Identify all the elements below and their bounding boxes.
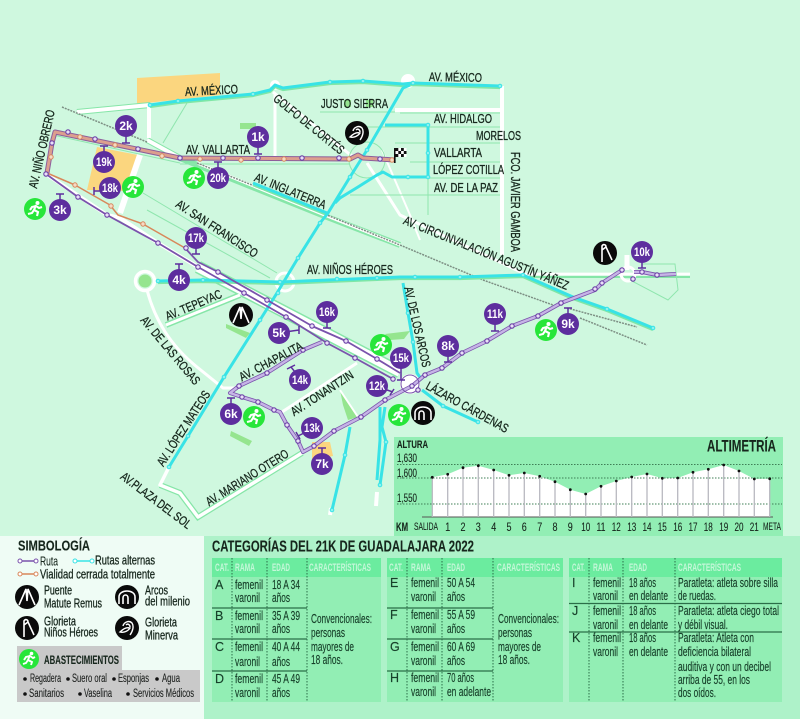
altimetry labels bbox=[397, 436, 776, 505]
table: categories A to D: años bbox=[272, 655, 290, 669]
icon: Glorieta Minerva bbox=[345, 121, 369, 145]
table: categories I to K: de ruedas. bbox=[678, 589, 716, 603]
table: categories E to H: 18 años. bbox=[498, 653, 530, 667]
marker 6k: 6k bbox=[224, 407, 238, 421]
kilometre axis: 18 bbox=[704, 520, 713, 534]
table: categories I to K: deficiencia bilateral bbox=[678, 645, 751, 659]
street labels: LÁZARO CÁRDENAS bbox=[424, 378, 511, 436]
table: categories I to K: y débil visual. bbox=[678, 618, 728, 632]
marker 14k bbox=[287, 365, 311, 391]
kilometre axis: 4 bbox=[491, 520, 496, 534]
table: categories A to D: Convencionales: bbox=[311, 612, 372, 626]
table: categories I to K: K bbox=[572, 631, 581, 645]
kilometre axis: 2 bbox=[460, 520, 466, 534]
marker 5k: 5k bbox=[272, 326, 286, 340]
table: categories E to H: femenil bbox=[411, 608, 439, 622]
legend: supplies: Regadera bbox=[30, 673, 61, 685]
table: categories A to D: varonil bbox=[235, 686, 260, 700]
table: categories E to H: 50 A 54 bbox=[447, 576, 475, 590]
table: categories E to H bbox=[387, 558, 563, 702]
table: categories A to D bbox=[212, 558, 381, 702]
main route bbox=[46, 132, 676, 452]
altimetry labels: 1,600 bbox=[397, 466, 417, 480]
table: categories A to D: 18 A 34 bbox=[272, 578, 300, 592]
kilometre axis: 7 bbox=[537, 520, 542, 534]
table: categories A to D: A bbox=[215, 578, 224, 592]
table: categories E to H: EDAD bbox=[447, 562, 465, 574]
route nodes: purple bbox=[44, 130, 659, 448]
orange blocks bbox=[87, 73, 333, 460]
marker 8k: 8k bbox=[441, 339, 455, 353]
table: categories E to H: 55 A 59 bbox=[447, 608, 475, 622]
marker 10k bbox=[631, 241, 653, 268]
legend route keys: Vialidad cerrada totalmente bbox=[40, 566, 155, 582]
kilometre axis: 15 bbox=[658, 520, 667, 534]
street labels: VALLARTA bbox=[434, 146, 483, 160]
marker 1k bbox=[247, 126, 269, 154]
table: categories A to D: femenil bbox=[235, 609, 263, 623]
icon: runner bbox=[370, 334, 392, 356]
thin green streets bbox=[53, 103, 678, 300]
white roads bbox=[46, 75, 690, 517]
table: categories I to K: en delante bbox=[629, 589, 668, 603]
green parks bbox=[138, 100, 410, 446]
street labels: AV. NIÑO OBRERO bbox=[26, 108, 58, 190]
street labels: AV. MÉXICO bbox=[185, 81, 238, 99]
alternate routes shadow bbox=[150, 83, 653, 330]
table: categories E to H: femenil bbox=[411, 640, 439, 654]
marker 16k: 16k bbox=[319, 305, 335, 319]
legend: Glorieta Niños Héroes bbox=[15, 614, 98, 640]
street labels bbox=[26, 69, 571, 532]
alternate routes bbox=[150, 81, 653, 510]
table: categories I to K: 18 años bbox=[629, 576, 656, 590]
kilometre axis: 13 bbox=[627, 520, 636, 534]
legend: supplies: Suero oral bbox=[72, 673, 107, 685]
legend: Arcos del milenio: del milenio bbox=[145, 594, 190, 608]
kilometre axis: KM bbox=[396, 520, 408, 534]
marker 17k bbox=[185, 227, 207, 254]
marker 15k bbox=[390, 347, 412, 380]
legend title: SIMBOLOGÍA bbox=[18, 538, 90, 554]
altitude profile chart bbox=[397, 464, 782, 517]
street labels: AV. HIDALGO bbox=[434, 112, 492, 126]
table: categories I to K: dos oídos. bbox=[678, 686, 716, 700]
marker 4k: 4k bbox=[172, 273, 186, 287]
table: categories I to K: 18 años bbox=[629, 631, 656, 645]
legend route keys: Rutas alternas bbox=[95, 552, 155, 568]
altimetry labels: 1,630 bbox=[397, 451, 417, 465]
street labels: AV. DE LOS ARCOS bbox=[401, 285, 433, 368]
table: categories A to D: C bbox=[215, 640, 224, 654]
table: categories A to D: RAMA bbox=[235, 562, 255, 574]
street labels: AV. LÓPEZ MATEOS bbox=[153, 388, 213, 469]
table: categories I to K: femenil bbox=[593, 604, 621, 618]
table: categories E to H: varonil bbox=[411, 654, 436, 668]
street labels: AV. CIRCUNVALACIÓN AGUSTÍN YÁÑEZ bbox=[401, 213, 571, 293]
legend: Puente Matute Remus: Matute Remus bbox=[44, 596, 102, 610]
table: categories I to K: varonil bbox=[593, 589, 618, 603]
legend: Glorieta Niños Héroes: Glorieta bbox=[44, 614, 77, 628]
street labels: JUSTO SIERRA bbox=[321, 97, 388, 111]
street labels: AV. MÉXICO bbox=[429, 69, 482, 85]
table: categories I to K: CAT. bbox=[572, 562, 585, 574]
street labels: AV. MARIANO OTERO bbox=[203, 447, 291, 509]
alternate route nodes bbox=[148, 79, 655, 512]
table: categories A to D: EDAD bbox=[272, 562, 290, 574]
legend: supplies bbox=[17, 646, 200, 702]
table: categories I to K: I bbox=[572, 576, 575, 590]
marker 19k: 19k bbox=[96, 155, 112, 169]
marker 1k: 1k bbox=[251, 130, 265, 144]
marker 19k bbox=[93, 146, 115, 173]
panel: categories bbox=[204, 536, 800, 719]
table: categories I to K: en delante bbox=[629, 645, 668, 659]
table: categories A to D: 40 A 44 bbox=[272, 640, 300, 654]
table: categories E to H: años bbox=[447, 654, 465, 668]
legend: Glorieta Minerva: Minerva bbox=[145, 628, 179, 642]
marker 2k bbox=[115, 115, 137, 143]
table: categories I to K: varonil bbox=[593, 618, 618, 632]
kilometre axis: 19 bbox=[719, 520, 728, 534]
table: categories A to D: mayores de bbox=[311, 640, 354, 654]
kilometre axis: META bbox=[763, 521, 781, 533]
table: categories A to D: 18 años. bbox=[311, 653, 343, 667]
marker 3k: 3k bbox=[53, 203, 67, 217]
table: categories A to D: años bbox=[272, 686, 290, 700]
supply stations bbox=[24, 167, 557, 428]
legend: Glorieta Niños Héroes: Niños Héroes bbox=[44, 624, 98, 640]
marker 18k: 18k bbox=[102, 181, 118, 195]
table: categories A to D: femenil bbox=[235, 640, 263, 654]
legend: Puente Matute Remus: Puente bbox=[44, 582, 72, 598]
marker 11k bbox=[484, 303, 506, 331]
marker 6k bbox=[220, 398, 242, 425]
street labels: AV. SAN FRANCISCO bbox=[173, 197, 261, 261]
table: categories E to H: H bbox=[390, 671, 399, 685]
legend route keys bbox=[18, 552, 155, 582]
kilometre axis: 17 bbox=[688, 520, 698, 534]
table: categories I to K: en delante bbox=[629, 618, 668, 632]
street labels: AV. INGLATERRA bbox=[252, 171, 329, 212]
table: categories A to D: personas bbox=[311, 626, 345, 640]
kilometre axis: 12 bbox=[612, 520, 621, 534]
table: categories E to H: años bbox=[447, 622, 465, 636]
table: categories E to H: femenil bbox=[411, 576, 439, 590]
map bbox=[24, 69, 690, 532]
table: categories E to H: CARACTERÍSTICAS bbox=[497, 561, 560, 574]
legend: supplies: Sanitarios bbox=[29, 688, 64, 700]
table: categories A to D: CAT. bbox=[215, 562, 229, 574]
marker 11k: 11k bbox=[487, 307, 503, 321]
icon: Puente Matute Remus bbox=[229, 303, 253, 327]
table: categories E to H: varonil bbox=[411, 685, 436, 699]
legend: supplies: ABASTECIMIENTOS bbox=[44, 653, 119, 667]
marker 7k: 7k bbox=[315, 457, 329, 471]
table: categories E to H: CAT. bbox=[389, 562, 403, 574]
route nodes: closed road bbox=[49, 135, 394, 226]
panel: legend bbox=[0, 536, 204, 719]
table: categories I to K: RAMA bbox=[593, 562, 613, 574]
legend: Arcos del milenio bbox=[115, 582, 190, 609]
altimetry labels: ALTURA bbox=[397, 439, 428, 451]
kilometre axis: 6 bbox=[522, 520, 527, 534]
table: categories A to D: años bbox=[272, 591, 290, 605]
table: categories A to D: femenil bbox=[235, 672, 263, 686]
marker 20k bbox=[207, 162, 229, 189]
km markers bbox=[49, 115, 653, 475]
icon: runner bbox=[24, 198, 46, 220]
kilometre axis: 10 bbox=[581, 520, 590, 534]
table: categories A to D: CARACTERÍSTICAS bbox=[309, 561, 371, 574]
legend: Arcos del milenio: Arcos bbox=[145, 582, 168, 598]
marker 12k: 12k bbox=[369, 379, 385, 393]
kilometre axis: 8 bbox=[552, 520, 558, 534]
street labels: AV. DE LA PAZ bbox=[434, 181, 498, 195]
legend: supplies: Agua bbox=[162, 673, 180, 685]
table: categories A to D: varonil bbox=[235, 655, 260, 669]
railway bbox=[62, 107, 647, 345]
kilometre axis bbox=[396, 520, 781, 534]
kilometre axis: 1 bbox=[445, 520, 450, 534]
marker 17k: 17k bbox=[188, 231, 204, 245]
kilometre axis: 14 bbox=[642, 520, 652, 534]
table: categories A to D: B bbox=[215, 609, 223, 623]
kilometre axis: 5 bbox=[506, 520, 512, 534]
table: categories I to K: Paratleta: Atleta con bbox=[678, 631, 754, 645]
table: categories I to K: CARACTERÍSTICAS bbox=[678, 561, 741, 574]
kilometre axis: SALIDA bbox=[414, 521, 438, 533]
icon: runner bbox=[243, 406, 265, 428]
table: categories I to K bbox=[569, 558, 782, 702]
marker 13k: 13k bbox=[304, 421, 320, 435]
legend: supplies: Esponjas bbox=[118, 673, 149, 685]
table: categories E to H: F bbox=[390, 608, 398, 622]
table: categories I to K: J bbox=[572, 604, 578, 618]
marker 14k: 14k bbox=[292, 373, 308, 387]
marker 9k bbox=[557, 308, 579, 335]
table: categories E to H: 70 años bbox=[447, 671, 474, 685]
legend: Glorieta Minerva bbox=[115, 614, 179, 642]
marker 4k bbox=[168, 264, 190, 291]
kilometre axis: 3 bbox=[476, 520, 481, 534]
marker 20k: 20k bbox=[210, 171, 226, 185]
table: categories A to D: varonil bbox=[235, 622, 260, 636]
street labels: AV.PLAZA DEL SOL bbox=[118, 469, 194, 532]
street labels: LÓPEZ COTILLA bbox=[433, 162, 504, 177]
icon: runner bbox=[183, 167, 205, 189]
icon: runner bbox=[122, 176, 144, 198]
kilometre axis: 20 bbox=[734, 520, 744, 534]
marker 18k bbox=[94, 177, 121, 199]
table: categories A to D: años bbox=[272, 622, 290, 636]
road edges bbox=[77, 105, 690, 517]
marker 7k bbox=[311, 448, 333, 475]
table: categories I to K: arriba de 55, en los bbox=[678, 673, 750, 687]
marker 8k bbox=[437, 335, 459, 362]
kilometre axis: 16 bbox=[673, 520, 682, 534]
street labels: AV. VALLARTA bbox=[186, 143, 251, 157]
table: categories E to H: G bbox=[390, 640, 400, 654]
table: categories E to H: E bbox=[390, 576, 398, 590]
marker 3k bbox=[49, 194, 71, 221]
table: categories A to D: 35 A 39 bbox=[272, 609, 300, 623]
table: categories E to H: mayores de bbox=[498, 640, 541, 654]
street labels: FCO. JAVIER GAMBOA bbox=[508, 152, 522, 252]
icon: runner bbox=[535, 319, 557, 341]
legend: Puente Matute Remus bbox=[15, 582, 102, 610]
marker 9k: 9k bbox=[561, 317, 575, 331]
marker 13k bbox=[296, 417, 323, 439]
legend route keys: Ruta bbox=[40, 554, 58, 568]
street labels: AV. DE LAS ROSAS bbox=[138, 314, 203, 388]
table: categories I to K: 18 años bbox=[629, 604, 656, 618]
table: categories A to D: femenil bbox=[235, 578, 263, 592]
legend: supplies: Servicios Médicos bbox=[133, 688, 194, 700]
table: categories I to K: varonil bbox=[593, 645, 618, 659]
table: categories E to H: 60 A 69 bbox=[447, 640, 475, 654]
street labels: GOLFO DE CORTÉS bbox=[271, 91, 348, 157]
marker 16k bbox=[316, 301, 338, 328]
street labels: AV. TONANTZIN bbox=[288, 368, 356, 419]
table: categories A to D: D bbox=[215, 672, 224, 686]
table: categories I to K: EDAD bbox=[629, 562, 647, 574]
table: categories A to D: varonil bbox=[235, 591, 260, 605]
legend: Glorieta Minerva: Glorieta bbox=[145, 614, 178, 630]
table: categories I to K: femenil bbox=[593, 576, 621, 590]
icon: runner bbox=[388, 404, 410, 426]
legend: supplies: Vaselina bbox=[84, 688, 112, 700]
table: categories E to H: años bbox=[447, 590, 465, 604]
table: categories E to H: varonil bbox=[411, 622, 436, 636]
icon: Glorieta Niños Héroes bbox=[593, 241, 617, 265]
street labels: AV. CHAPALITA bbox=[237, 339, 306, 384]
street labels: AV. TEPEYAC bbox=[163, 287, 224, 323]
finish flag bbox=[394, 148, 406, 163]
table: categories E to H: personas bbox=[498, 626, 532, 640]
table: categories E to H: femenil bbox=[411, 671, 439, 685]
kilometre axis: 11 bbox=[596, 520, 606, 534]
marker 15k: 15k bbox=[393, 351, 409, 365]
table: categories E to H: varonil bbox=[411, 590, 436, 604]
kilometre axis: 21 bbox=[750, 520, 759, 534]
street labels: MORELOS bbox=[476, 129, 521, 143]
table: categories A to D: 45 A 49 bbox=[272, 672, 300, 686]
table: categories E to H: en adelante bbox=[447, 685, 491, 699]
marker 2k: 2k bbox=[119, 119, 133, 133]
table: categories E to H: Convencionales: bbox=[498, 612, 559, 626]
marker 12k bbox=[366, 375, 394, 397]
marker 5k bbox=[268, 322, 299, 344]
table: categories I to K: femenil bbox=[593, 631, 621, 645]
categories title: CATEGORÍAS DEL 21K DE GUADALAJARA 2022 bbox=[212, 538, 474, 556]
kilometre axis: 9 bbox=[568, 520, 573, 534]
panel: altimetry bbox=[394, 436, 783, 536]
icon: Arcos del milenio bbox=[411, 401, 435, 425]
altimetry labels: 1,550 bbox=[397, 491, 417, 505]
table: categories E to H: RAMA bbox=[411, 562, 431, 574]
marker 10k: 10k bbox=[634, 245, 650, 259]
street labels: AV. NIÑOS HÉROES bbox=[307, 262, 393, 277]
